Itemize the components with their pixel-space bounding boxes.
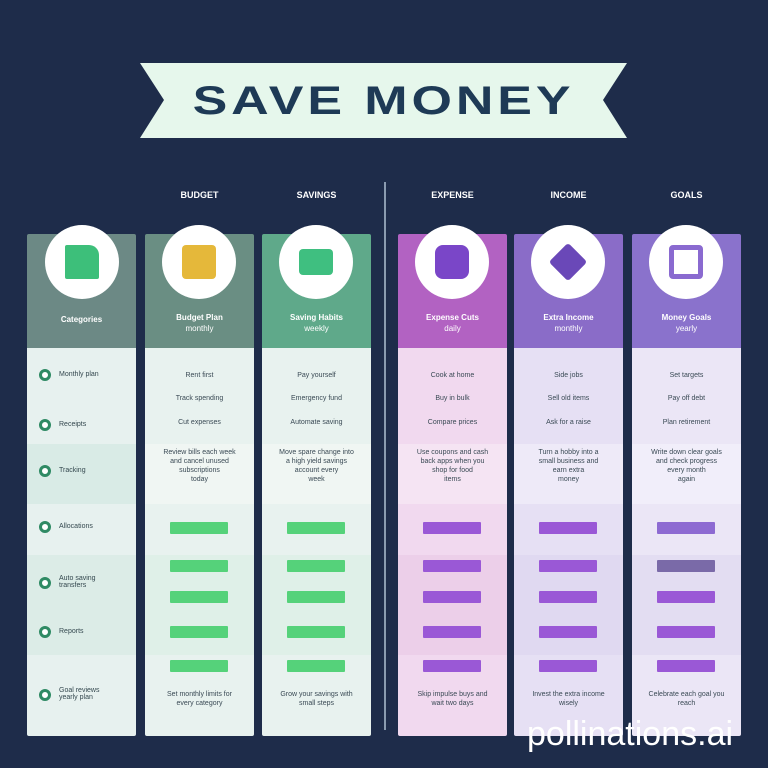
panel: column 6 goals	[632, 234, 741, 736]
panel: column 1 features: Auto saving	[59, 575, 96, 582]
panel: column 2 budget: Cut expenses	[178, 419, 221, 426]
panel: column 5 income: Sell old items	[548, 395, 589, 402]
panel: column 5 income: wisely	[559, 700, 578, 707]
panel: column 1 features: Tracking	[59, 467, 86, 474]
panel: column 6 goals: Celebrate each goal you	[649, 691, 724, 698]
column labels	[180, 190, 702, 200]
panel: column 5 income: money	[558, 476, 579, 483]
panel: column 6 goals: and check progress	[656, 458, 717, 465]
panel: column 3 savings	[262, 234, 371, 736]
panel: column 6 goals: Write down clear goals	[651, 449, 722, 456]
panel: column 6 goals: again	[678, 476, 695, 483]
panel: column 5 income: Turn a hobby into a	[538, 449, 599, 456]
icon circles	[45, 225, 723, 299]
panel: column 2 budget: every category	[177, 700, 222, 707]
panel: column 1 features: Reports	[59, 628, 84, 635]
panel: column 6 goals: Pay off debt	[668, 395, 705, 402]
panel: column 5 income: small business and	[539, 458, 598, 465]
panel: column 4 expense: back apps when you	[421, 458, 484, 465]
panel: column 3 savings: week	[308, 476, 325, 483]
panel: column 3 savings: Grow your savings with	[280, 691, 353, 698]
panel: column 1 features: Categories	[61, 315, 102, 324]
icon: wallet	[45, 225, 119, 299]
title: SAVE MONEY	[193, 79, 574, 123]
panel: column 5 income: Ask for a raise	[546, 419, 591, 426]
panel: column 3 savings: a high yield savings	[286, 458, 347, 465]
panel: column 5 income: Invest the extra income	[532, 691, 605, 698]
panel: column 2 budget	[145, 234, 254, 736]
panel: column 3 savings: Pay yourself	[297, 372, 336, 379]
panel: column 4 expense: Compare prices	[428, 419, 477, 426]
panel: column 4 expense: shop for food	[432, 467, 473, 474]
panel: column 4 expense	[398, 234, 507, 736]
panel: column 6 goals: Money Goals	[662, 313, 711, 322]
panel: column 6 goals: yearly	[676, 324, 697, 333]
panel: column 3 savings: weekly	[304, 324, 329, 333]
column labels: SAVINGS	[297, 190, 336, 200]
panel: column 5 income: Extra Income	[543, 313, 594, 322]
panel: column 3 savings: Move spare change into	[279, 449, 354, 456]
panel: column 4 expense: Buy in bulk	[435, 395, 470, 402]
panel: column 5 income: earn extra	[553, 467, 584, 474]
icon: goal frame	[649, 225, 723, 299]
panel: column 3 savings: Automate saving	[290, 419, 343, 426]
column labels: INCOME	[550, 190, 586, 200]
panel: column 6 goals: Set targets	[670, 372, 703, 379]
icon: piggy	[162, 225, 236, 299]
panel: column 4 expense: Use coupons and cash	[417, 449, 488, 456]
panel: column 4 expense: wait two days	[431, 700, 474, 707]
panel: column 5 income: Side jobs	[554, 372, 583, 379]
column labels: BUDGET	[180, 190, 218, 200]
panel: column 4 expense: Expense Cuts	[426, 313, 479, 322]
panel: column 2 budget: Rent first	[185, 372, 214, 379]
watermark: pollinations.ai	[527, 715, 733, 753]
divider	[384, 182, 386, 730]
panel: column 3 savings: Saving Habits	[290, 313, 343, 322]
icon: chair	[279, 225, 353, 299]
panel: column 1 features: Goal reviews	[59, 687, 99, 694]
panel: column 3 savings: account every	[295, 467, 338, 474]
panel: column 2 budget: Track spending	[176, 395, 223, 402]
panel: column 1 features: transfers	[59, 582, 86, 589]
panel: column 4 expense: daily	[444, 324, 461, 333]
panel: column 2 budget: Review bills each week	[163, 449, 236, 456]
panel: column 1 features: Monthly plan	[59, 371, 99, 378]
panel: column 3 savings: small steps	[299, 700, 334, 707]
panel: column 1 features	[27, 234, 136, 736]
panel: column 6 goals: every month	[667, 467, 706, 474]
title banner	[140, 63, 627, 138]
icon: puzzle	[415, 225, 489, 299]
panel: column 3 savings: Emergency fund	[291, 395, 342, 402]
panel: column 4 expense: items	[444, 476, 461, 483]
panel: column 6 goals: reach	[678, 700, 695, 707]
panel: column 6 goals: Plan retirement	[663, 419, 710, 426]
panel: column 2 budget: subscriptions	[179, 467, 220, 474]
panel: column 4 expense: Skip impulse buys and	[417, 691, 488, 698]
icon: tag	[531, 225, 605, 299]
panel: column 2 budget: Set monthly limits for	[167, 691, 232, 698]
panel: column 1 features: Allocations	[59, 523, 93, 530]
panel: column 1 features: yearly plan	[59, 694, 93, 701]
panel: column 1 features: Receipts	[59, 421, 86, 428]
column labels: GOALS	[670, 190, 702, 200]
panel: column 4 expense: Cook at home	[431, 372, 474, 379]
panel: column 2 budget: today	[191, 476, 208, 483]
panel: column 5 income: monthly	[554, 324, 582, 333]
panel: column 2 budget: Budget Plan	[176, 313, 223, 322]
column labels: EXPENSE	[431, 190, 474, 200]
panel: column 2 budget: and cancel unused	[170, 458, 229, 465]
panel: column 5 income	[514, 234, 623, 736]
panel: column 2 budget: monthly	[185, 324, 214, 333]
